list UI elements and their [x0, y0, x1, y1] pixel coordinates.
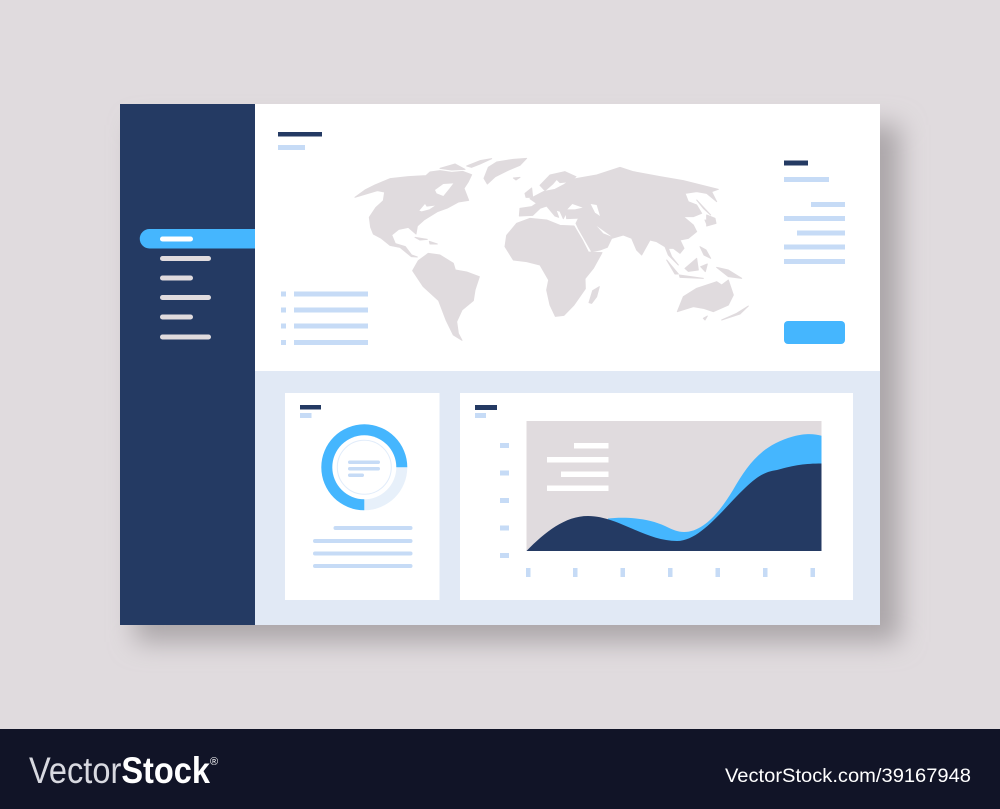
button: [784, 321, 845, 344]
map legend: [281, 292, 368, 345]
north america: [355, 171, 472, 257]
south america: [413, 253, 479, 340]
eurasia: [519, 167, 718, 265]
greenland: [484, 158, 527, 184]
plot background: [526, 421, 822, 551]
right text block: [784, 160, 845, 264]
footer id: VectorStock.com/39167948: [725, 766, 971, 787]
new zealand: [703, 306, 748, 320]
africa: [505, 218, 602, 316]
chart heading: [475, 405, 497, 418]
area series: navy: [526, 464, 822, 551]
registered mark: ®: [210, 756, 218, 768]
panel: donut: [285, 393, 440, 600]
area series: blue: [608, 434, 822, 551]
active menu item: [140, 229, 255, 248]
footer logo: VectorStock: [29, 750, 210, 791]
scandinavia: [540, 172, 576, 191]
arctic islands: [440, 159, 492, 170]
card shadow: [135, 125, 900, 642]
footer band: [0, 729, 1000, 809]
x axis labels: [526, 568, 815, 577]
menu labels: [160, 236, 211, 340]
chart labels: [547, 443, 608, 491]
japan and sakhalin: [697, 200, 716, 226]
australia: [677, 280, 733, 312]
seas: [419, 183, 612, 237]
donut chart: [321, 424, 407, 510]
sidebar: [120, 104, 255, 625]
caribbean: [415, 237, 437, 244]
panel: area chart: [460, 393, 853, 600]
map heading: [278, 132, 322, 150]
southeast asia islands: [667, 247, 742, 278]
donut text: [313, 526, 412, 568]
lower panel: [255, 371, 880, 625]
madagascar: [589, 287, 599, 303]
donut heading: [300, 405, 321, 418]
main panel: [255, 104, 880, 371]
world map: [355, 158, 748, 340]
y axis labels: [500, 443, 509, 558]
iceland and britain: [513, 177, 533, 197]
